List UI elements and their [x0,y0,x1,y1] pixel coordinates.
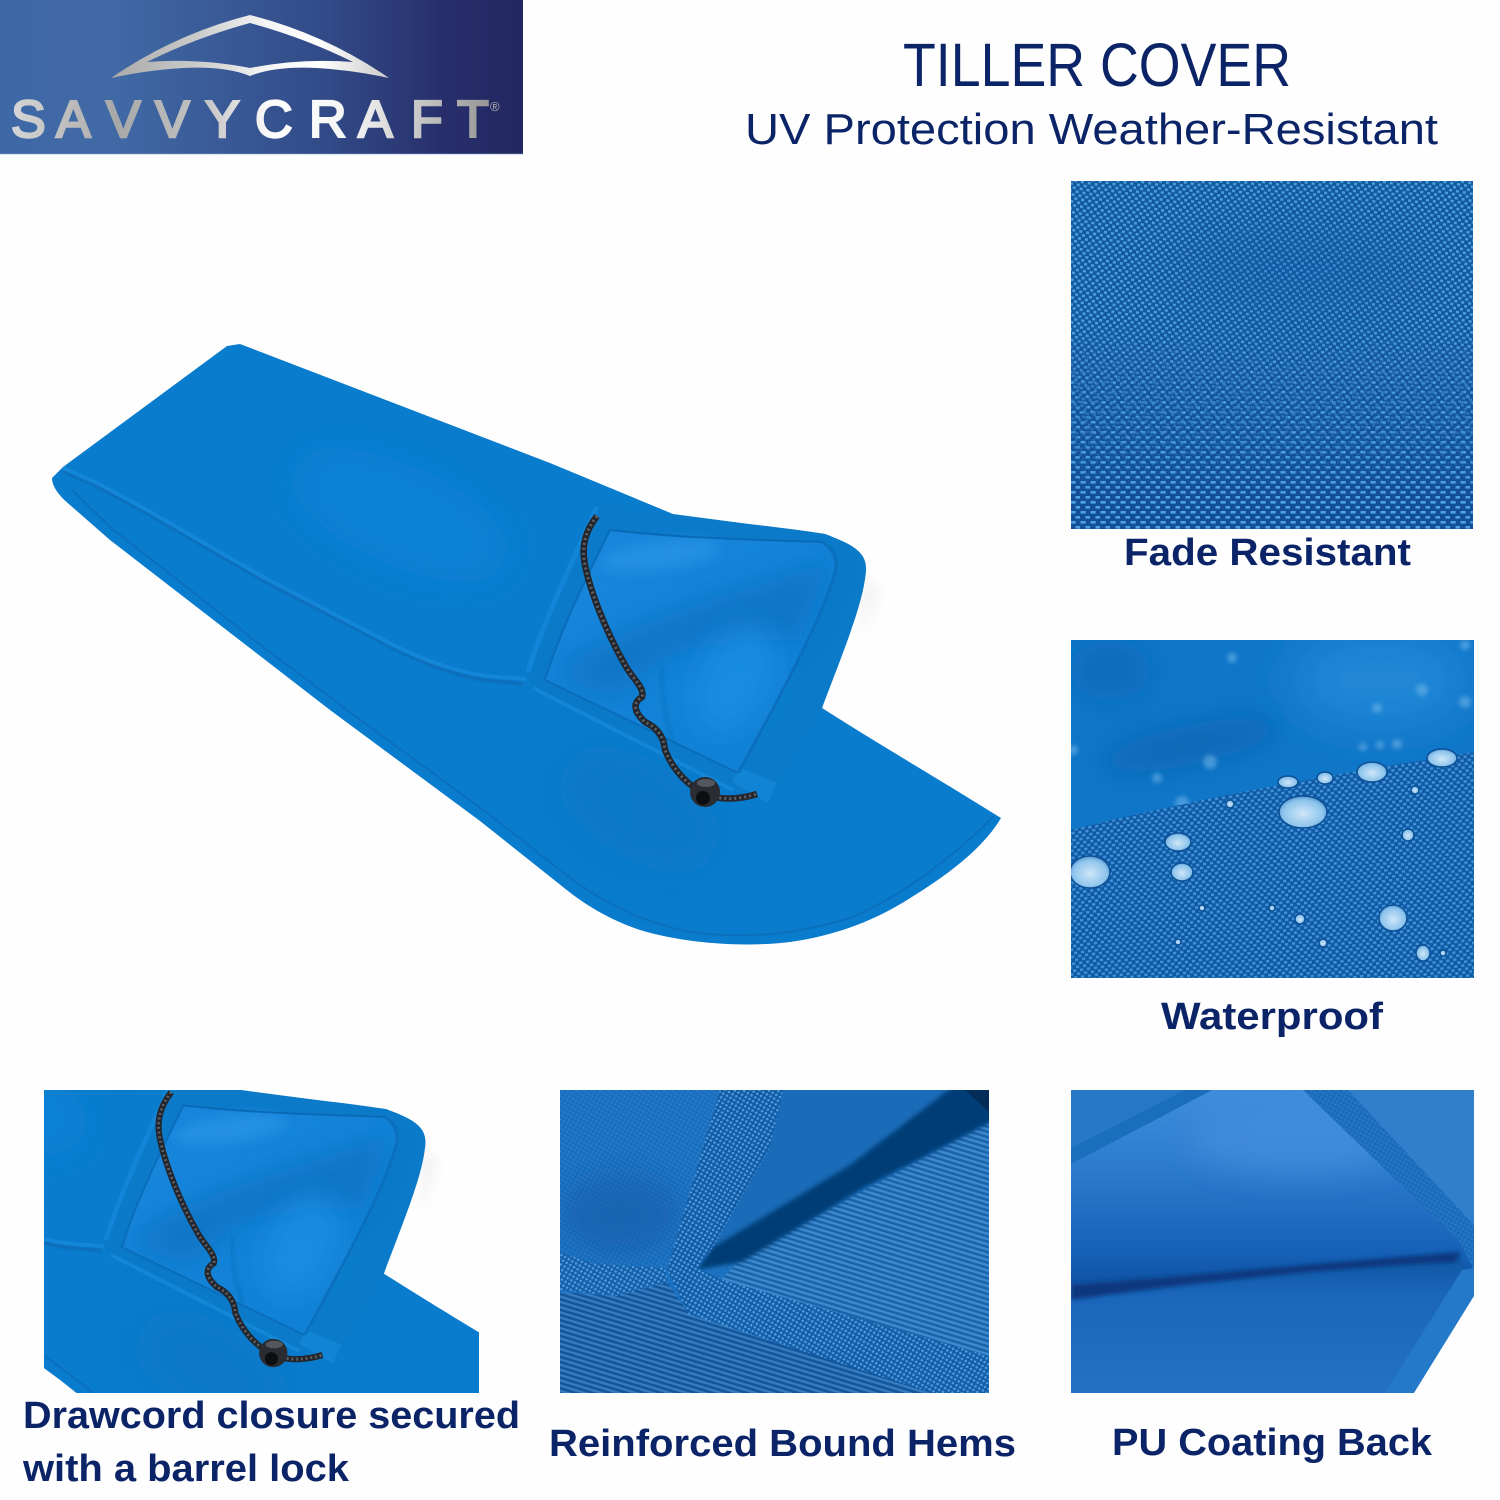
dark crease [1071,1252,1460,1300]
left bound hem [560,1252,668,1296]
label: drawcord closure [22,1395,520,1490]
label: reinforced bound hems: Reinforced Bound Hems [549,1423,1016,1465]
lower bound hem [1385,1268,1474,1393]
top-left hem fabric [1071,1090,1212,1164]
cut corner [1414,1296,1474,1393]
fabric surface [1071,752,1474,978]
icon: canopy logo mark [111,15,389,78]
photo: fabric weave [1071,181,1473,529]
main product image: tiller cover [52,344,1001,944]
bottom fabric [560,1282,933,1393]
label: waterproof: Waterproof [1161,996,1383,1038]
registered mark: ® [490,99,500,114]
label: drawcord closure: with a barrel lock [22,1448,350,1490]
photo: PU coating [1071,1090,1474,1393]
logo banner [0,0,523,154]
title: TILLER COVER [903,31,1291,99]
dark shadow [696,1085,995,1270]
subtitle: UV Protection Weather-Resistant [745,105,1438,154]
water drops [1070,749,1457,961]
upper flap [713,1090,960,1247]
right fabric [720,1122,989,1356]
photo: drawcord close-up [44,1090,479,1393]
right bound hem [1303,1090,1474,1270]
vertical bound hem [667,1090,783,1318]
label: drawcord closure: Drawcord closure secured [23,1395,520,1437]
bokeh lights [1068,640,1471,810]
photo: reinforced hems [560,1090,989,1393]
label: fade resistant: Fade Resistant [1124,532,1411,574]
label: PU coating back: PU Coating Back [1112,1422,1433,1464]
top-right fabric [1340,1090,1474,1228]
brand name: SAVVYCRAFT [11,91,489,149]
horizontal bound hem [688,1268,989,1393]
photo: water droplets on fabric [1071,640,1474,978]
